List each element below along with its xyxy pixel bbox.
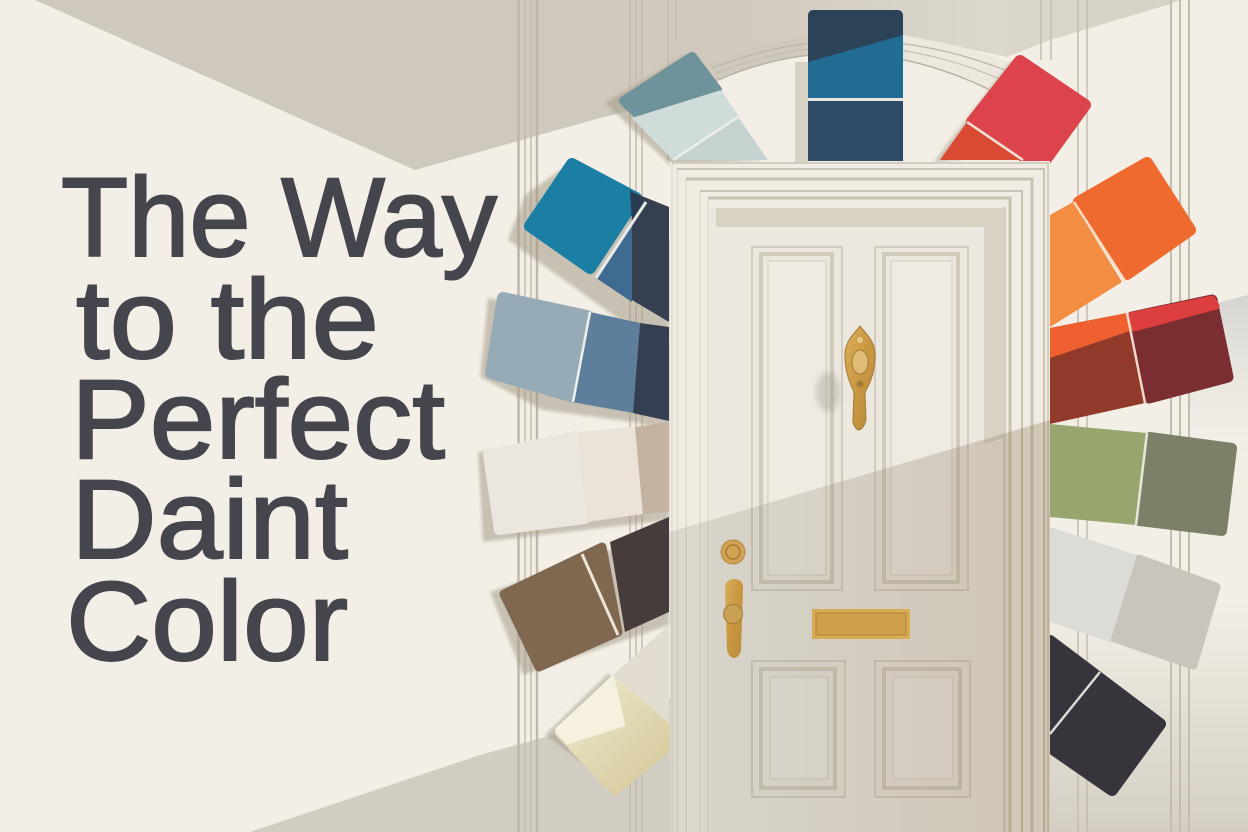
door arch: [700, 33, 1007, 162]
swatch: red: [940, 61, 1085, 165]
door handle: [724, 579, 743, 658]
title: Perfect: [71, 357, 445, 482]
swatch: beige: [488, 422, 669, 530]
title: to the: [76, 257, 379, 382]
door knocker: [816, 326, 875, 430]
wall mouldings: [518, 0, 1189, 832]
title: Daint: [71, 457, 348, 582]
door panel: upper left: [752, 247, 842, 590]
diagonal door shadow: [670, 420, 1050, 832]
swatch: green: [1050, 424, 1232, 531]
door panel: lower left: [752, 661, 845, 797]
swatch: grey: [1050, 527, 1216, 665]
letter slot: [812, 609, 910, 639]
door frame: [670, 162, 1050, 832]
swatch: cream: [558, 625, 669, 789]
transom shadow: [716, 208, 1003, 227]
swatch: charcoal: [1050, 641, 1160, 790]
swatch: top navy: [808, 10, 903, 161]
swatch: brown: [504, 517, 669, 667]
swatch: orange: [1050, 163, 1190, 327]
deadbolt: [721, 540, 745, 564]
title: [61, 155, 497, 684]
swatch: red maroon: [1050, 299, 1228, 424]
title: The Way: [61, 155, 497, 280]
title: Color: [66, 559, 348, 684]
door panel: lower right: [875, 661, 970, 797]
door panel: upper right: [875, 247, 968, 590]
swatch: pale teal: [624, 57, 768, 160]
swatch shadows: [478, 55, 1020, 790]
swatch: teal blue: [530, 164, 669, 322]
door: [710, 207, 1003, 832]
swatch: light blue: [491, 298, 669, 421]
